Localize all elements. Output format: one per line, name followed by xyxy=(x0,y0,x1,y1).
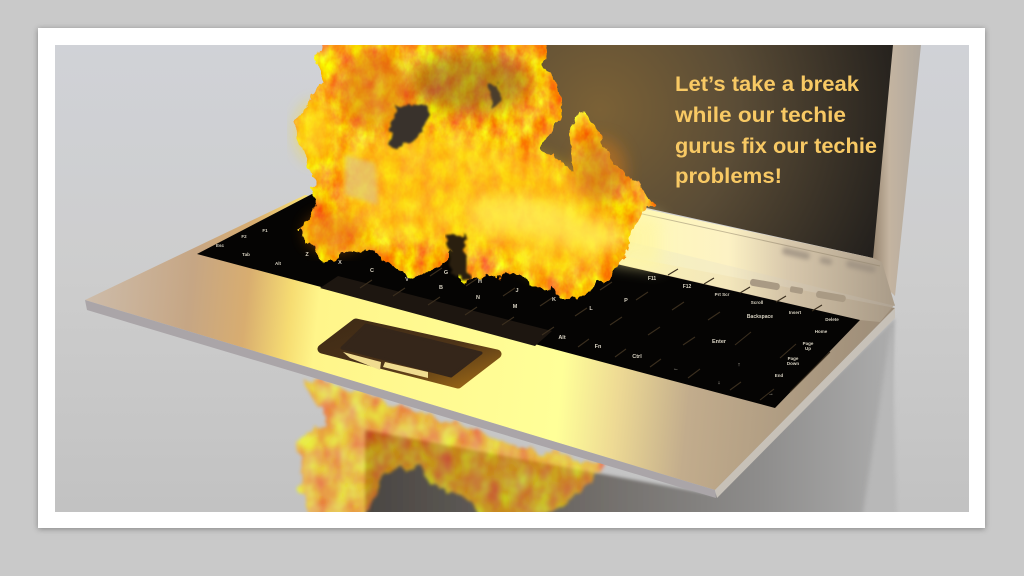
screen bezel hinge band xyxy=(628,209,895,306)
base front edge xyxy=(85,300,716,498)
spacebar xyxy=(320,276,552,346)
key labels: Backspace xyxy=(747,314,773,320)
key labels: ← xyxy=(673,366,679,372)
white hot flame area xyxy=(470,197,630,252)
reflection of laptop on desk xyxy=(296,318,897,524)
key labels: Down xyxy=(787,361,799,366)
key labels xyxy=(216,228,839,397)
base back surface glow xyxy=(619,242,895,322)
key labels: End xyxy=(775,373,784,378)
key labels: Home xyxy=(815,329,828,334)
screen tinted mottling xyxy=(410,52,530,112)
keyboard well xyxy=(197,194,860,408)
hole through flames xyxy=(388,102,428,148)
key labels: Scroll xyxy=(751,300,763,305)
laptop base top xyxy=(85,195,895,490)
screen message text: problems! xyxy=(675,165,782,188)
flame glow on bezel xyxy=(600,205,660,268)
screen message text: while our techie xyxy=(674,104,846,127)
photo background xyxy=(55,45,969,512)
lower left orange flame xyxy=(307,214,363,250)
base right edge xyxy=(715,308,895,498)
key labels: Page xyxy=(788,356,799,361)
blurred button reflections in bezel xyxy=(782,247,877,273)
reflected flames xyxy=(296,378,604,524)
key labels: Delete xyxy=(825,317,839,322)
orange upper flame xyxy=(340,52,410,128)
key labels: ↓ xyxy=(718,380,721,386)
key separators xyxy=(360,258,830,400)
key labels: Insert xyxy=(789,310,802,315)
key labels: Enter xyxy=(712,339,727,345)
laptop xyxy=(85,45,921,498)
key labels: P xyxy=(624,298,628,304)
key labels: Alt xyxy=(558,335,566,341)
key labels: B xyxy=(439,285,443,291)
key labels: X xyxy=(338,260,342,266)
button middle xyxy=(790,286,803,294)
key labels: N xyxy=(476,295,480,301)
screen message text: gurus fix our techie xyxy=(675,135,877,158)
keyboard xyxy=(197,194,860,408)
reflected screen frame xyxy=(863,348,895,512)
button right xyxy=(816,291,846,302)
key labels: Esc xyxy=(216,243,224,248)
dark flame gap right xyxy=(487,82,502,112)
key labels: Z xyxy=(305,252,309,258)
key labels: M xyxy=(513,304,518,310)
key labels: Prt Scr xyxy=(715,292,730,297)
key labels: F1 xyxy=(262,228,268,233)
key labels: Page xyxy=(803,341,814,346)
key labels: Fn xyxy=(595,344,602,350)
reflected screen xyxy=(365,318,895,520)
key labels: K xyxy=(552,297,556,303)
key labels: J xyxy=(515,288,519,294)
key labels: F2 xyxy=(241,234,247,239)
power buttons xyxy=(750,278,846,303)
touchpad left button xyxy=(343,352,381,370)
right orange flame xyxy=(574,138,626,202)
bright flame core xyxy=(340,134,620,275)
laptop screen xyxy=(520,45,893,258)
flame body xyxy=(292,20,653,300)
key labels: Up xyxy=(805,346,811,351)
key labels: V xyxy=(405,277,409,283)
key labels: H xyxy=(478,279,482,285)
touchpad right button xyxy=(383,362,428,378)
bezel crease line xyxy=(642,214,880,266)
key labels: C xyxy=(370,268,374,274)
screen edge seen through flames xyxy=(345,155,378,205)
key labels: F11 xyxy=(648,276,656,282)
key labels: → xyxy=(768,391,774,397)
touchpad xyxy=(322,323,497,384)
photo: burning laptop xyxy=(55,20,969,524)
key labels: ↑ xyxy=(738,362,741,368)
touchpad surround xyxy=(322,323,497,384)
laptop flames xyxy=(292,20,660,300)
key labels: Alt xyxy=(275,261,282,266)
key labels: Tab xyxy=(242,252,250,257)
touchpad surface xyxy=(342,325,481,376)
key labels: Ctrl xyxy=(632,354,642,360)
left yellow lobe xyxy=(298,104,334,160)
laptop screen frame xyxy=(868,45,921,296)
key labels: F12 xyxy=(683,284,692,290)
button left xyxy=(750,278,780,291)
keyboard gap xyxy=(449,232,468,280)
key labels: L xyxy=(589,306,593,312)
screen message text: Let’s take a break xyxy=(675,73,859,96)
key labels: G xyxy=(444,270,448,276)
